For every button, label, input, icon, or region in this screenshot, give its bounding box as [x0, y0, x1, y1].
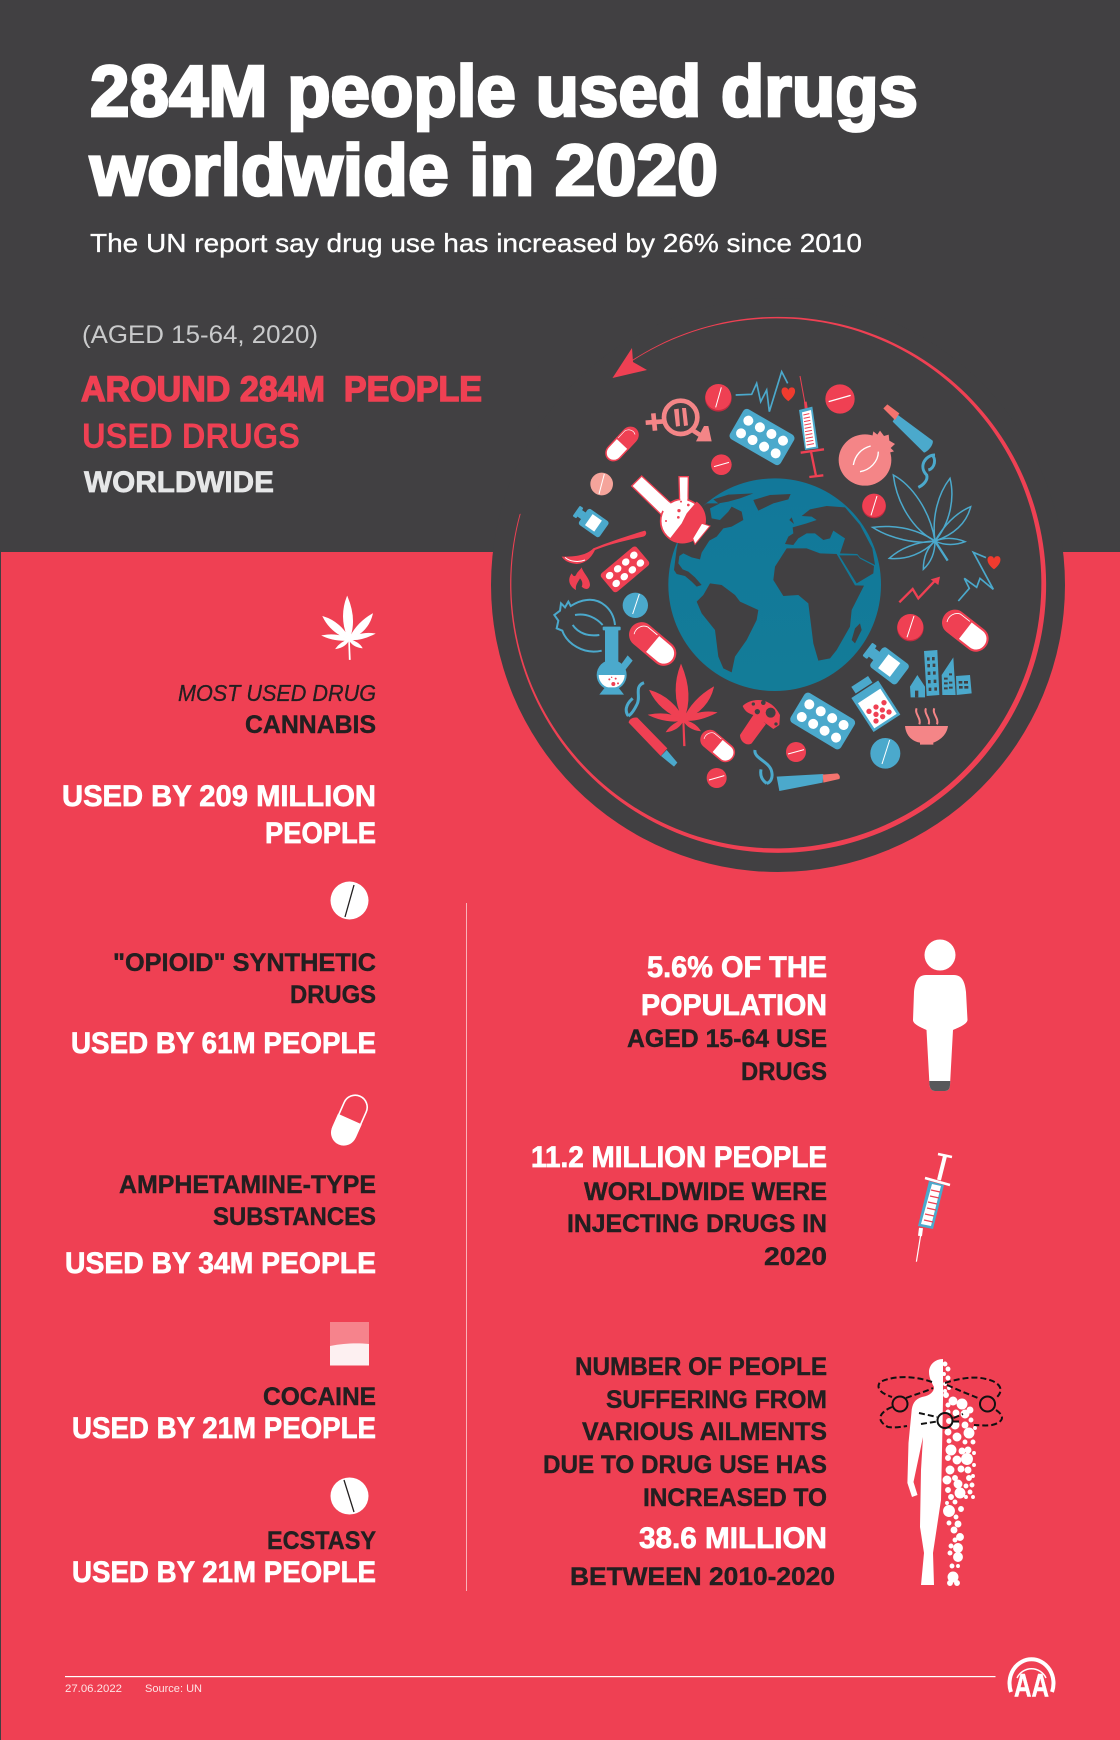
- icon: red pill: [825, 384, 855, 414]
- eurasia: [785, 506, 875, 565]
- icons: top right cluster: [799, 376, 1000, 602]
- icon: red cannabis leaf: [649, 665, 716, 746]
- icon: city buildings: [910, 650, 972, 697]
- text: opioid: "OPIOID" SYNTHETIC: [113, 949, 376, 977]
- panel: drug list: [62, 597, 376, 1589]
- icon: blue pill: [870, 738, 900, 769]
- icon: large capsule: [624, 617, 681, 671]
- globe: [668, 478, 881, 691]
- headline statistic: WORLDWIDE: [84, 466, 274, 499]
- arabia: [839, 555, 874, 583]
- headline statistic: USED DRUGS: [82, 417, 300, 456]
- icon: cannabis outline: [873, 475, 971, 569]
- title: worldwide in 2020: [89, 131, 718, 211]
- text: ailments: 38.6 MILLION: [639, 1522, 827, 1555]
- icon: white pill: [330, 882, 368, 920]
- left edge strip: [0, 552, 1, 1740]
- panel: global statistics: [531, 940, 1002, 1591]
- text: ailments: SUFFERING FROM: [606, 1386, 827, 1414]
- icons: bottom left cluster: [554, 600, 780, 788]
- text: ailments: VARIOUS AILMENTS: [582, 1418, 827, 1446]
- footer: [65, 1659, 1054, 1704]
- text: injecting drugs: 11.2 MILLION PEOPLE: [531, 1141, 827, 1174]
- icon: spoon: [562, 531, 646, 564]
- text: injecting drugs: INJECTING DRUGS IN: [567, 1210, 827, 1238]
- icon: vial: [571, 503, 610, 538]
- icon: steam: [916, 708, 937, 724]
- icon: white syringe: [916, 1154, 952, 1262]
- text: cocaine: [72, 1383, 376, 1445]
- icon: joint: [883, 404, 933, 453]
- icon: red pill: [862, 494, 886, 518]
- text: opioid: DRUGS: [290, 981, 376, 1009]
- age note: (AGED 15-64, 2020): [82, 321, 318, 349]
- icon: flask: [632, 476, 710, 544]
- icon: red pill: [707, 768, 727, 788]
- icon: pill jar: [846, 673, 900, 732]
- date: 27.06.2022: [65, 1683, 122, 1695]
- text: ailments: DUE TO DRUG USE HAS: [543, 1451, 827, 1479]
- icon: heart: [988, 556, 1000, 569]
- logo: AA: [1014, 1668, 1049, 1704]
- text: opioid: USED BY 61M PEOPLE: [71, 1027, 376, 1060]
- logo: [1010, 1659, 1054, 1704]
- circular arrow: [510, 317, 1046, 853]
- headline statistic: [81, 370, 482, 499]
- text: amphetamine: [65, 1171, 376, 1280]
- icon: capsule: [601, 423, 643, 465]
- arctic islands: [713, 493, 753, 503]
- icon: red joint: [629, 717, 677, 767]
- icon: heart: [782, 387, 795, 401]
- icon: small red pill: [786, 742, 806, 762]
- title: 284M people used drugs: [90, 52, 918, 132]
- text: cannabis: CANNABIS: [245, 711, 376, 739]
- icon: person: [913, 940, 968, 1091]
- text: cannabis: PEOPLE: [265, 817, 376, 850]
- text: injecting drugs: 2020: [764, 1243, 827, 1271]
- icon: flame: [569, 567, 590, 590]
- text: amphetamine: SUBSTANCES: [213, 1203, 376, 1231]
- icon: red blister pack: [599, 545, 651, 594]
- text: cannabis: USED BY 209 MILLION: [62, 780, 376, 813]
- text: population share: POPULATION: [641, 989, 827, 1022]
- text: population share: 5.6% OF THE: [647, 951, 827, 984]
- madagascar: [852, 623, 862, 643]
- icon: blue blister pack: [789, 691, 857, 751]
- headline statistic: AROUND 284M PEOPLE: [81, 370, 482, 409]
- icon: bong: [597, 627, 633, 695]
- icons: bottom right cluster: [777, 605, 994, 791]
- subtitle: The UN report say drug use has increased by 26% since 2010: [90, 228, 862, 258]
- british isles: [789, 517, 794, 524]
- icon: white capsule: [327, 1091, 372, 1149]
- icon: small red pill: [711, 454, 732, 475]
- north america: [674, 503, 743, 587]
- text: population share: DRUGS: [741, 1058, 827, 1086]
- text: ailments: BETWEEN 2010-2020: [570, 1563, 835, 1591]
- icon: opium poppy: [839, 431, 895, 486]
- icon: pulse line: [958, 552, 993, 601]
- icon: syringe: [799, 376, 824, 477]
- text: population share: [627, 951, 827, 1086]
- icon: capsule: [937, 605, 994, 657]
- source: Source: UN: [145, 1683, 202, 1695]
- text: cannabis: MOST USED DRUG: [178, 680, 376, 706]
- icon: red pill: [705, 384, 732, 412]
- text: ailments: NUMBER OF PEOPLE: [575, 1353, 827, 1381]
- text: population share: AGED 15-64 USE: [627, 1025, 827, 1053]
- icon: white ecstasy pill: [330, 1478, 368, 1514]
- greenland: [753, 494, 791, 511]
- text: ailments: [543, 1353, 835, 1591]
- icon: rising trend arrow: [899, 577, 940, 602]
- icon: smoke: [626, 683, 644, 716]
- icon: human body with ailments: [878, 1359, 1002, 1586]
- text: ailments: INCREASED TO: [643, 1484, 827, 1512]
- text: cannabis: [62, 680, 376, 850]
- africa: [773, 548, 864, 661]
- icons: top left cluster: [562, 372, 796, 618]
- icon: red pill: [897, 614, 924, 641]
- dark circle with globe illustration: [491, 298, 1065, 872]
- icon: blue joint: [777, 773, 840, 791]
- text: ecstasy: ECSTASY: [267, 1527, 376, 1555]
- icon: pulse line: [736, 372, 788, 412]
- text: ecstasy: USED BY 21M PEOPLE: [72, 1556, 376, 1589]
- text: ecstasy: [72, 1527, 376, 1589]
- icon: cocaine bag: [330, 1322, 369, 1366]
- icon: poppy outline: [554, 600, 615, 652]
- icon: smoke: [918, 455, 935, 487]
- text: cocaine: USED BY 21M PEOPLE: [72, 1412, 376, 1445]
- text: injecting drugs: [531, 1141, 827, 1271]
- text: cocaine: COCAINE: [263, 1383, 376, 1411]
- icon: white cannabis leaf: [322, 597, 374, 660]
- icon: blue blister pack: [728, 407, 796, 467]
- south america: [697, 583, 758, 672]
- icon: mushroom: [740, 700, 780, 744]
- text: injecting drugs: WORLDWIDE WERE: [584, 1178, 827, 1206]
- icon: blue pill: [623, 593, 648, 618]
- text: amphetamine: AMPHETAMINE-TYPE: [119, 1171, 376, 1199]
- icon: bowl: [905, 726, 948, 745]
- icon: salmon pill: [590, 473, 613, 495]
- text: opioid: [71, 949, 376, 1060]
- text: amphetamine: USED BY 34M PEOPLE: [65, 1247, 376, 1280]
- icon: gender symbol: [646, 401, 712, 441]
- icon: vial: [860, 639, 910, 686]
- title: [89, 52, 918, 211]
- icon: smoke: [755, 750, 772, 783]
- dark header panel: [0, 0, 1120, 552]
- icon: capsule: [696, 726, 739, 766]
